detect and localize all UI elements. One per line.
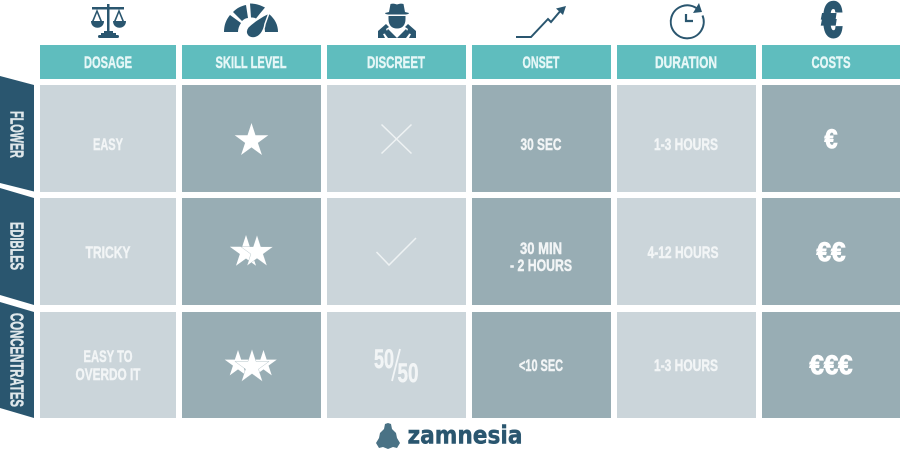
- cell: two euros: €€: [816, 237, 846, 267]
- row 3: concentrates cells: [40, 312, 900, 418]
- logo: zamnesia: [376, 420, 522, 450]
- row 1: flower cells: [40, 85, 900, 192]
- cell: easy: [40, 85, 176, 192]
- cell: 50/50: [327, 312, 466, 418]
- cell: tricky: TRICKY: [86, 244, 130, 262]
- cell: <10 sec: [472, 312, 611, 418]
- cell: two euros: [762, 198, 900, 305]
- header: discreet: [327, 45, 466, 79]
- row tab: flower: [0, 76, 34, 192]
- cell: one star: [182, 85, 321, 192]
- icon: rising arrow: [516, 6, 566, 37]
- header: onset: ONSET: [522, 54, 560, 72]
- header: costs: COSTS: [812, 54, 850, 72]
- cell: three euros: [762, 312, 900, 418]
- header: duration: DURATION: [655, 54, 717, 72]
- header: skill level: [182, 45, 321, 79]
- cell: <10 sec: <10 SEC: [519, 357, 563, 375]
- icon: detective: [378, 4, 416, 38]
- cell: 30 min - 2 hours: - 2 HOURS: [510, 257, 572, 275]
- cell: 1-3 hours: 1-3 HOURS: [654, 357, 718, 375]
- icon: scales: [91, 4, 126, 38]
- cell: 30 sec: 30 SEC: [520, 136, 562, 154]
- cell: one euro: [762, 85, 900, 192]
- header: onset: [472, 45, 611, 79]
- cell: three euros: €€€: [810, 350, 852, 380]
- cell: two stars: [182, 198, 321, 305]
- row 2: edibles cells: [40, 198, 900, 305]
- icon: gauge: [224, 4, 278, 38]
- row tab: flower: FLOWER: [6, 111, 26, 158]
- row tab: concentrates: [0, 302, 34, 418]
- cell: 30 min - 2 hours: [472, 198, 611, 305]
- header: dosage: [40, 45, 176, 79]
- cell: easy to overdo it: EASY TO: [84, 348, 133, 366]
- cell: 4-12 hours: [617, 198, 756, 305]
- cell: three stars: [182, 312, 321, 418]
- header: skill level: SKILL LEVEL: [216, 54, 286, 72]
- cell: 1-3 hours: [617, 85, 756, 192]
- cell: 1-3 hours: [617, 312, 756, 418]
- header: discreet: DISCREET: [367, 54, 425, 72]
- cell: 30 sec: [472, 85, 611, 192]
- cell: 30 min - 2 hours: 30 MIN: [520, 240, 562, 258]
- cell: 50/50: 50: [374, 344, 394, 374]
- cell: easy: EASY: [93, 136, 123, 154]
- cell: easy to overdo it: [40, 312, 176, 418]
- header: costs: [762, 45, 900, 79]
- cell: 50/50: 50: [398, 358, 418, 388]
- icon: clock: [671, 3, 704, 38]
- row tab: edibles: [0, 188, 34, 305]
- header: dosage: DOSAGE: [84, 54, 132, 72]
- cell: 1-3 hours: 1-3 HOURS: [654, 136, 718, 154]
- cell: check: [327, 198, 466, 305]
- cell: cross: [327, 85, 466, 192]
- icon: logo mask: [376, 423, 400, 449]
- cell: easy to overdo it: OVERDO IT: [76, 366, 140, 384]
- header: duration: [617, 45, 756, 79]
- row tab: edibles: EDIBLES: [6, 222, 26, 270]
- wordmark: zamnesia: [408, 420, 522, 450]
- cell: tricky: [40, 198, 176, 305]
- cell: 4-12 hours: 4-12 HOURS: [648, 244, 718, 262]
- cell: one euro: €: [824, 124, 838, 154]
